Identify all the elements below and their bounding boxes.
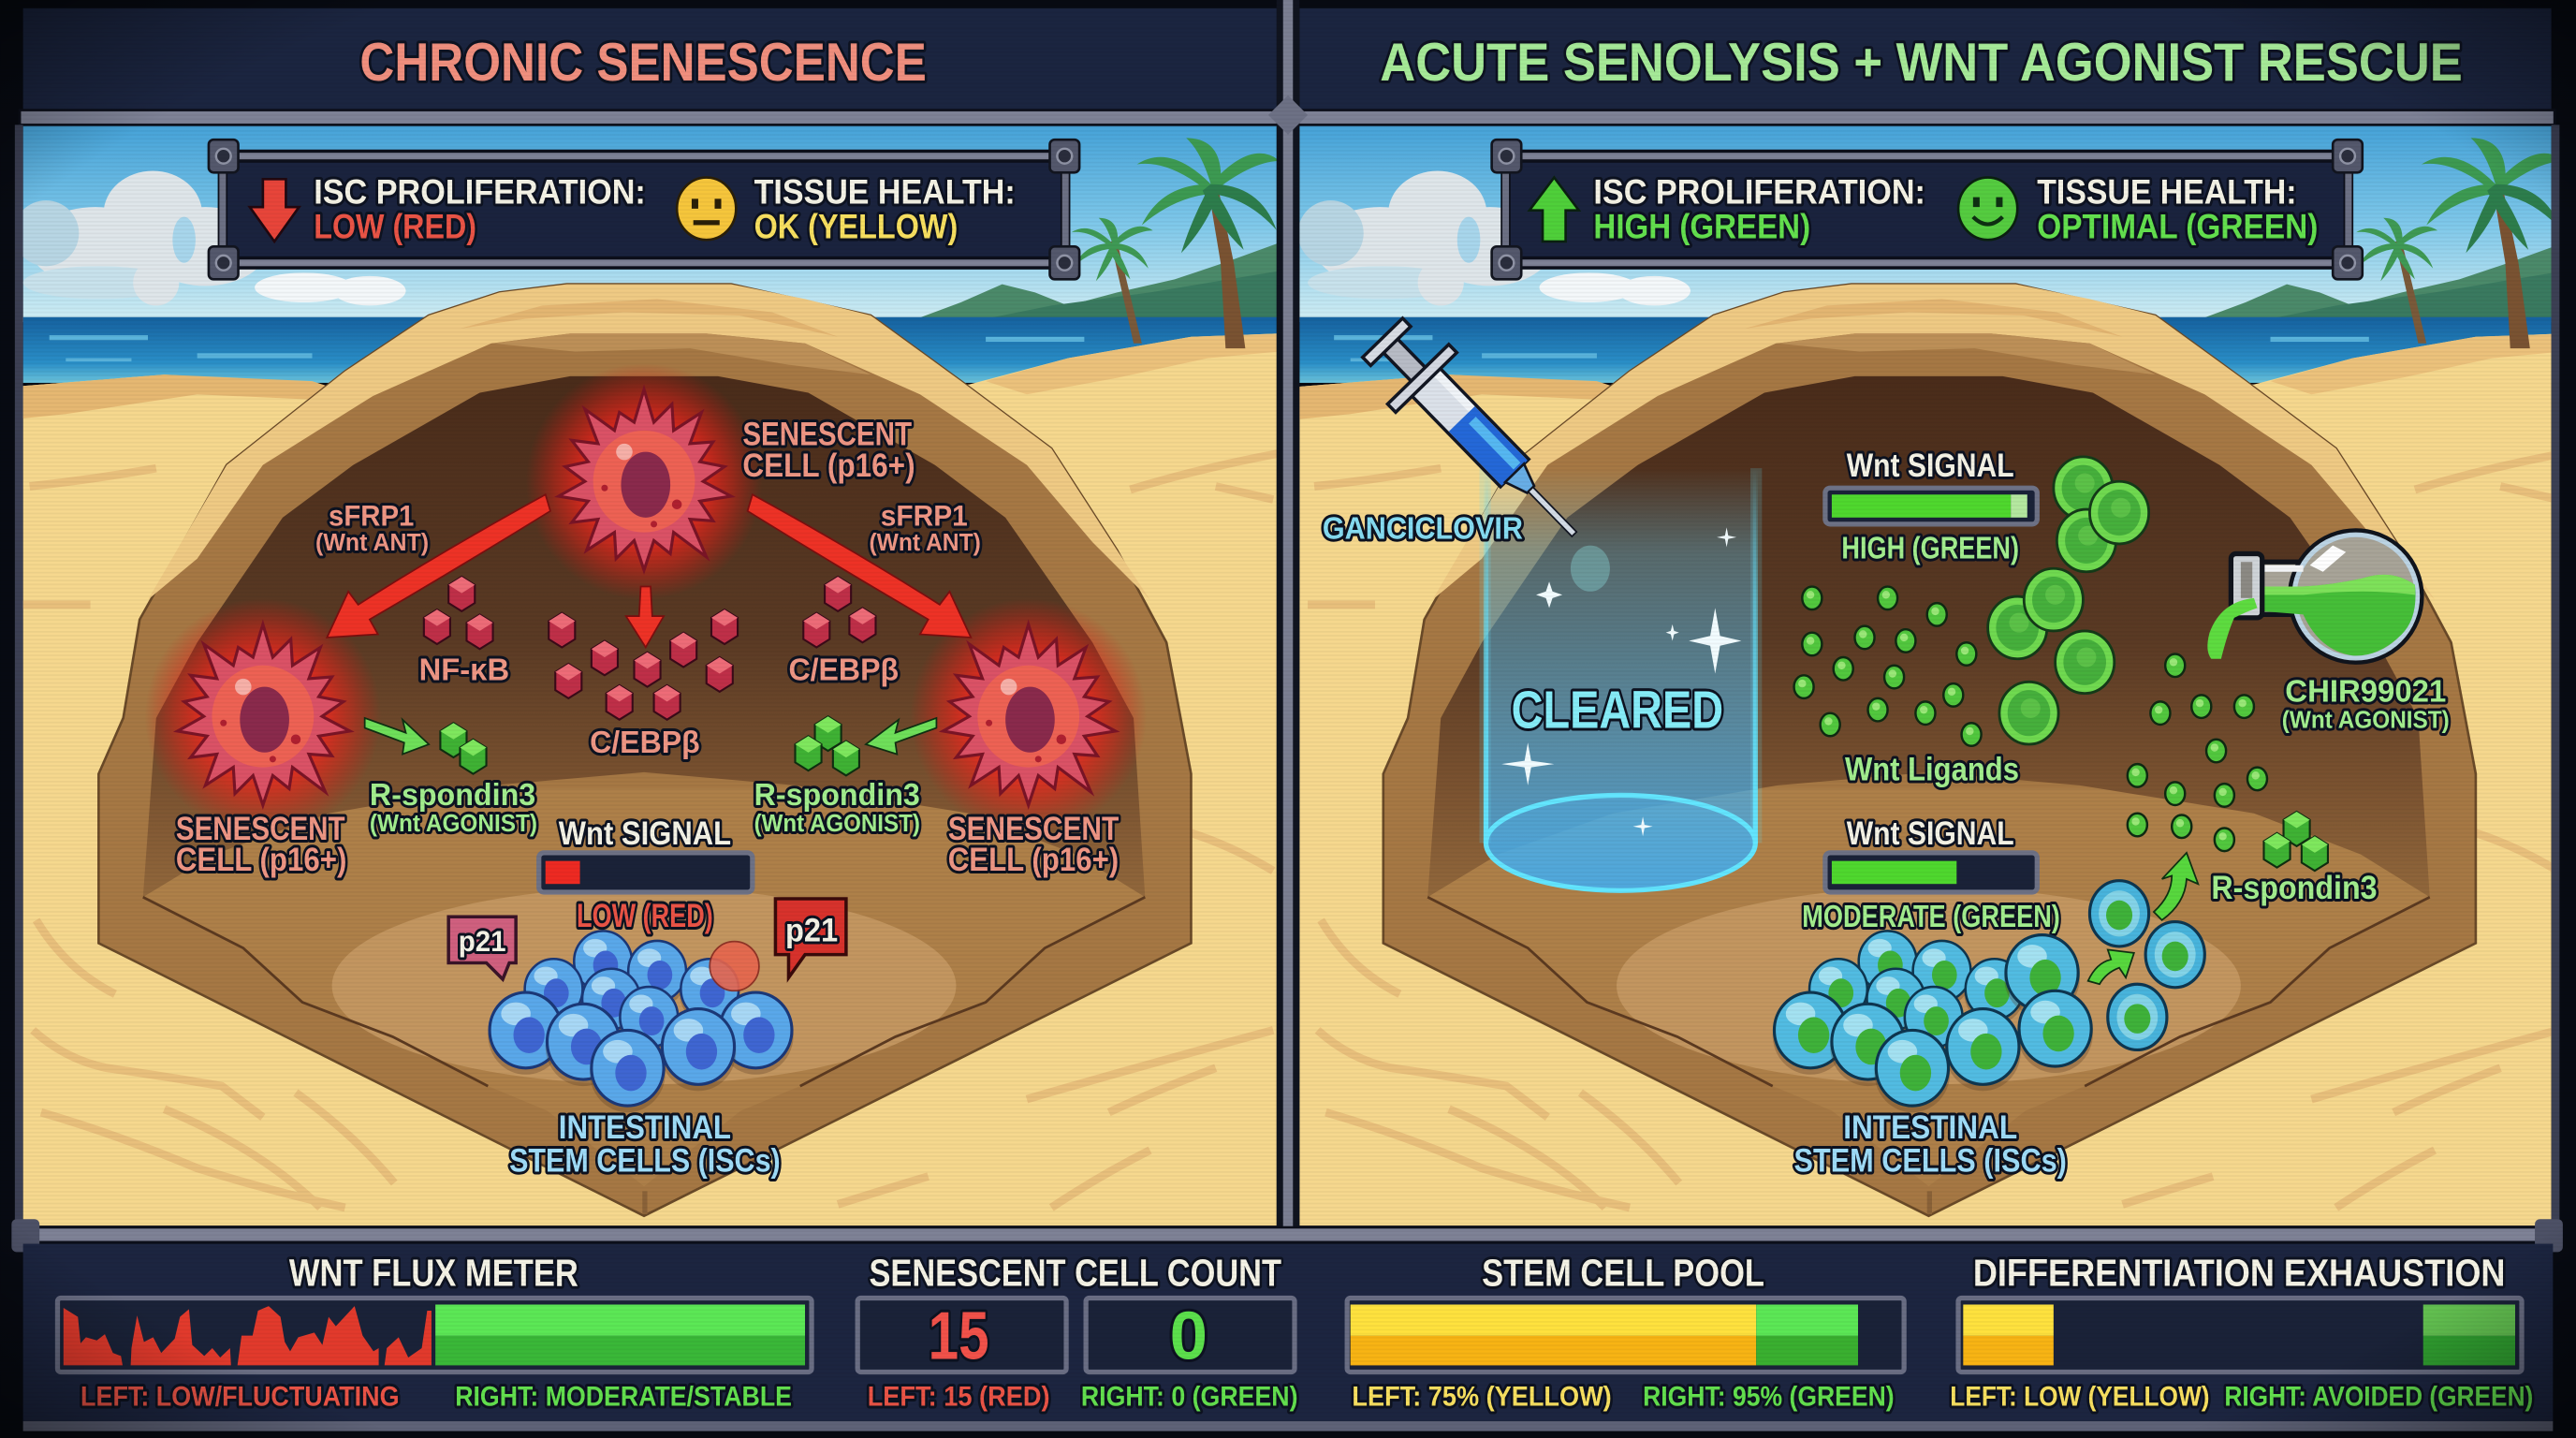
gauge: Wnt signal moderate <box>1802 815 2060 934</box>
metric: senescent cell count: SENESCENT CELL COUNT <box>869 1251 1281 1294</box>
icon: syringe <box>1352 308 1604 564</box>
arrow: green up <box>2154 853 2198 920</box>
label: CLEARED: CLEARED <box>1512 680 1723 739</box>
label: right senescent cell <box>948 811 1120 878</box>
label: intestinal stem cells right: INTESTINAL <box>1843 1109 2017 1146</box>
molecules: C/EBPb cluster right <box>803 577 875 647</box>
label: CHIR99021 <box>2282 674 2450 733</box>
icon: dividing stem cells <box>2089 881 2204 1049</box>
molecules: R-spondin3 right <box>795 716 859 775</box>
icon: right senescent cell <box>910 598 1147 835</box>
metric: stem cell pool <box>1347 1251 1904 1413</box>
label: intestinal stem cells right: STEM CELLS (ISCs) <box>1794 1142 2067 1179</box>
metric: senescent cell count: LEFT: 15 (RED) <box>868 1382 1050 1413</box>
molecules: R-spondin3 left <box>440 723 487 774</box>
gauge: Wnt signal high <box>1825 448 2037 566</box>
label: intestinal stem cells left: STEM CELLS (ISCs) <box>509 1142 781 1179</box>
stem cell cluster: blue ISCs <box>488 931 794 1112</box>
metric: senescent cell count: RIGHT: 0 (GREEN) <box>1081 1382 1298 1413</box>
metric: differentiation exhaustion <box>1950 1251 2533 1413</box>
gauge: Wnt signal moderate: MODERATE (GREEN) <box>1802 900 2060 934</box>
label: sFRP1 right: (Wnt ANT) <box>869 528 981 556</box>
label: CHIR99021: (Wnt AGONIST) <box>2282 705 2450 733</box>
label: sFRP1 left: (Wnt ANT) <box>315 528 429 556</box>
metric: senescent cell count: 0 <box>1170 1299 1208 1373</box>
panel: left crypt contents <box>145 363 1147 1179</box>
label: left senescent cell: SENESCENT <box>176 811 345 847</box>
label: left senescent cell <box>176 811 346 878</box>
molecules: CHIR droplets <box>2128 654 2267 851</box>
title: chronic senescence: CHRONIC SENESCENCE <box>359 33 927 93</box>
label: intestinal stem cells left <box>509 1109 781 1179</box>
text: tissue health optimal: TISSUE HEALTH: <box>2037 173 2297 212</box>
panel: bottom metrics <box>23 1244 2553 1431</box>
text: tissue health optimal <box>2037 173 2318 245</box>
gauge: Wnt signal low: LOW (RED) <box>577 898 713 934</box>
label: sFRP1 right: sFRP1 <box>881 499 968 533</box>
text: ISC proliferation low <box>314 173 646 245</box>
molecules: R-spondin3 <box>2263 812 2328 871</box>
text: tissue health ok: OK (YELLOW) <box>754 207 958 245</box>
text: ISC proliferation low: LOW (RED) <box>314 207 476 245</box>
arrow: red left <box>327 494 550 638</box>
label: C/EBPb right: C/EBPβ <box>788 653 899 688</box>
title: acute senolysis and wnt agonist rescue: ACUTE SENOLYSIS + WNT AGONIST RESCUE <box>1380 33 2463 93</box>
label: sFRP1 left <box>315 499 429 556</box>
molecules: NF-kB cluster <box>424 577 493 649</box>
label: sFRP1 left: sFRP1 <box>329 499 414 533</box>
gauge: Wnt signal high: HIGH (GREEN) <box>1841 532 2019 566</box>
icon: green up arrow <box>1530 178 1579 242</box>
callout: p21 pink <box>448 917 516 979</box>
text: tissue health optimal: OPTIMAL (GREEN) <box>2037 207 2318 245</box>
label: top senescent cell: CELL (p16+) <box>742 448 915 484</box>
gauge: Wnt signal low: Wnt SIGNAL <box>559 815 731 852</box>
title bar: acute senolysis <box>1299 8 2552 111</box>
molecules: Wnt ligands <box>1794 587 1982 746</box>
arrow: green curved <box>2088 949 2134 984</box>
panel: right crypt contents <box>1323 308 2450 1179</box>
callout: p21 pink: p21 <box>459 924 506 958</box>
metric: differentiation exhaustion: DIFFERENTIATION EXHAUSTION <box>1973 1251 2505 1294</box>
panel: left status HUD <box>209 139 1079 279</box>
title bar: chronic senescence <box>23 8 1278 111</box>
metric: Wnt flux meter <box>57 1251 812 1413</box>
metric: differentiation exhaustion: LEFT: LOW (YELLOW) <box>1950 1382 2210 1413</box>
metric: stem cell pool: LEFT: 75% (YELLOW) <box>1352 1382 1612 1413</box>
icon: red down arrow <box>250 179 299 242</box>
metric: differentiation exhaustion: RIGHT: AVOIDED (GREEN) <box>2224 1382 2533 1413</box>
label: R-spondin3 left: R-spondin3 <box>370 778 535 813</box>
metric: Wnt flux meter: RIGHT: MODERATE/STABLE <box>455 1382 792 1413</box>
arrow: green right <box>866 718 936 755</box>
label: intestinal stem cells right <box>1794 1109 2067 1179</box>
metric: Wnt flux meter: WNT FLUX METER <box>289 1251 578 1294</box>
label: R-spondin3 left <box>370 778 537 837</box>
label: R-spondin3 right: (Wnt AGONIST) <box>754 809 920 837</box>
gauge: Wnt signal moderate: Wnt SIGNAL <box>1847 815 2014 852</box>
label: sFRP1 right <box>869 499 981 556</box>
scene: left beach background and crypt <box>22 125 1277 1226</box>
gauge: Wnt signal high: Wnt SIGNAL <box>1847 448 2014 484</box>
label: R-spondin3 right <box>754 778 920 837</box>
callout: p21 red: p21 <box>785 913 838 949</box>
callout: p21 red <box>775 899 846 977</box>
label: CHIR99021: CHIR99021 <box>2285 674 2446 709</box>
text: ISC proliferation low: ISC PROLIFERATION: <box>314 173 646 212</box>
metric: stem cell pool: RIGHT: 95% (GREEN) <box>1643 1382 1895 1413</box>
icon: large green cells <box>1988 457 2149 744</box>
arrow: red centre <box>626 587 664 647</box>
gauge: Wnt signal low <box>539 815 753 934</box>
arrow: green left <box>365 718 429 755</box>
label: right senescent cell: CELL (p16+) <box>948 842 1119 878</box>
label: top senescent cell: SENESCENT <box>742 417 913 453</box>
icon: top senescent cell <box>526 363 762 600</box>
scene: right beach background and crypt <box>1299 125 2552 1226</box>
label: R-spondin3: R-spondin3 <box>2211 870 2378 906</box>
icon: happy face <box>1958 178 2017 240</box>
panel: right status HUD <box>1492 139 2363 279</box>
text: ISC proliferation high <box>1593 173 1925 245</box>
text: ISC proliferation high: HIGH (GREEN) <box>1593 207 1810 245</box>
icon: left senescent cell <box>145 598 381 835</box>
label: Wnt ligands: Wnt Ligands <box>1845 752 2019 788</box>
label: C/EBPb centre: C/EBPβ <box>590 726 700 760</box>
icon: cleared hologram cylinder <box>1484 468 1758 891</box>
molecules: centre cluster <box>549 609 738 720</box>
metric: Wnt flux meter: LEFT: LOW/FLUCTUATING <box>80 1382 400 1413</box>
label: NF-kB: NF-κB <box>419 653 509 688</box>
label: ganciclovir: GANCICLOVIR <box>1323 512 1523 547</box>
label: right senescent cell: SENESCENT <box>948 811 1120 847</box>
icon: sparkles <box>1501 527 1741 836</box>
label: R-spondin3 left: (Wnt AGONIST) <box>370 809 537 837</box>
metric: senescent cell count <box>857 1251 1298 1413</box>
metric: stem cell pool: STEM CELL POOL <box>1482 1251 1764 1294</box>
icon: neutral face <box>677 178 736 240</box>
text: tissue health ok: TISSUE HEALTH: <box>754 173 1016 212</box>
label: left senescent cell: CELL (p16+) <box>176 842 346 878</box>
arrow: red right <box>748 494 971 638</box>
stem cell cluster: teal ISCs <box>1773 931 2093 1112</box>
label: intestinal stem cells left: INTESTINAL <box>559 1109 731 1146</box>
icon: CHIR99021 flask <box>2207 531 2422 662</box>
metric: senescent cell count: 15 <box>929 1299 989 1373</box>
text: ISC proliferation high: ISC PROLIFERATION: <box>1593 173 1925 212</box>
label: R-spondin3 right: R-spondin3 <box>754 778 920 813</box>
label: top senescent cell <box>742 417 915 484</box>
text: tissue health ok <box>754 173 1016 245</box>
